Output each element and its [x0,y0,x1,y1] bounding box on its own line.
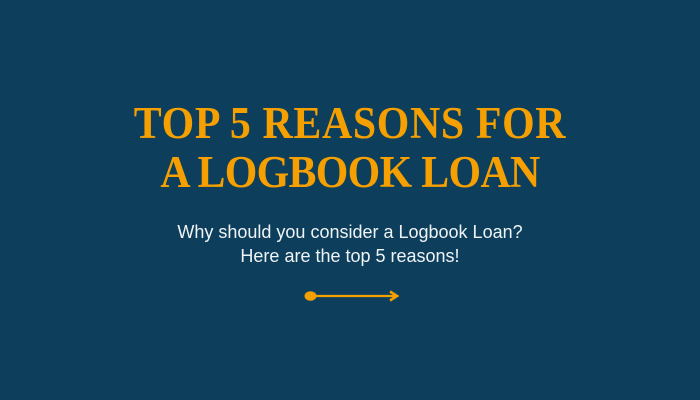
title [134,98,566,197]
subtitle: Why should you consider a Logbook Loan? [177,222,523,242]
title: TOP 5 REASONS FOR [134,98,566,148]
title: A LOGBOOK LOAN [160,147,540,197]
subtitle: Here are the top 5 reasons! [240,246,460,266]
arrow [304,290,400,302]
subtitle [177,222,523,266]
